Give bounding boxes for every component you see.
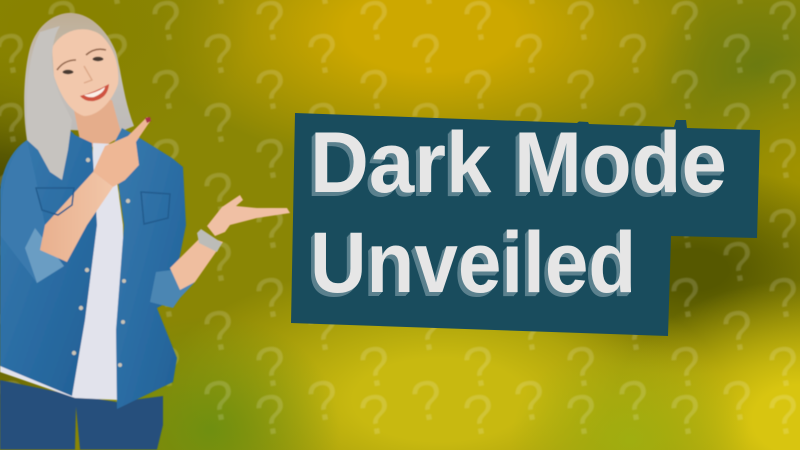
question mark pattern: ? <box>613 228 655 295</box>
question mark pattern: ? <box>94 89 136 156</box>
question mark pattern: ? <box>354 195 396 262</box>
question mark pattern: ? <box>458 381 500 448</box>
question mark pattern: ? <box>406 89 448 156</box>
question mark pattern: ? <box>302 159 344 226</box>
question mark pattern: ? <box>250 195 292 262</box>
question mark pattern: ? <box>406 297 448 364</box>
question mark pattern: ? <box>561 264 603 331</box>
question mark pattern: ? <box>94 297 136 364</box>
question mark pattern: ? <box>458 56 500 123</box>
question mark pattern: ? <box>42 125 84 192</box>
chest pocket left <box>36 188 74 215</box>
question mark pattern: ? <box>509 367 551 434</box>
question mark pattern: ? <box>94 20 136 87</box>
hair front lock <box>27 26 72 180</box>
open hand right <box>207 195 290 236</box>
question mark pattern: ? <box>354 381 396 448</box>
question mark pattern: ? <box>509 20 551 87</box>
eyes <box>62 57 104 74</box>
question mark pattern: ? <box>42 333 84 400</box>
question mark pattern: ? <box>717 297 759 364</box>
question mark pattern: ? <box>613 159 655 226</box>
question mark pattern: ? <box>613 20 655 87</box>
nose <box>84 66 92 83</box>
question mark pattern: ? <box>717 159 759 226</box>
question mark pattern: ? <box>665 333 707 400</box>
question mark pattern: ? <box>250 56 292 123</box>
question mark pattern: ? <box>354 333 396 400</box>
watch <box>197 229 222 252</box>
question mark pattern: ? <box>146 195 188 262</box>
question mark pattern: ? <box>406 159 448 226</box>
question mark pattern: ? <box>146 56 188 123</box>
question mark pattern: ? <box>406 20 448 87</box>
question mark pattern: ? <box>250 264 292 331</box>
chest pocket right <box>141 192 170 224</box>
question mark pattern: ? <box>509 89 551 156</box>
t-shirt <box>0 143 124 400</box>
question mark pattern: ? <box>613 89 655 156</box>
jeans <box>0 380 163 450</box>
question mark pattern: ? <box>302 297 344 364</box>
question mark pattern: ? <box>302 367 344 434</box>
question mark pattern: ? <box>665 381 707 448</box>
nail <box>145 117 151 123</box>
hand pointing <box>93 117 151 187</box>
question mark pattern: ? <box>613 367 655 434</box>
question mark pattern: ? <box>42 195 84 262</box>
question mark pattern: ? <box>302 89 344 156</box>
question mark pattern: ? <box>717 228 759 295</box>
smile <box>80 84 109 101</box>
question mark pattern: ? <box>198 159 240 226</box>
forearm pointing up <box>40 172 113 262</box>
question mark pattern: ? <box>146 333 188 400</box>
question mark pattern: ? <box>302 20 344 87</box>
question mark pattern: ? <box>458 195 500 262</box>
title line: Unveiled: Unveiled <box>310 215 636 311</box>
question mark pattern: ? <box>198 20 240 87</box>
denim jacket left <box>0 125 97 396</box>
denim jacket right <box>113 128 186 409</box>
question mark pattern: ? <box>458 125 500 192</box>
question mark pattern: ? <box>717 20 759 87</box>
question mark pattern: ? <box>458 333 500 400</box>
question mark pattern: ? <box>406 228 448 295</box>
question mark pattern: ? <box>94 367 136 434</box>
question mark pattern: ? <box>354 56 396 123</box>
question mark pattern: ? <box>509 159 551 226</box>
question mark pattern: ? <box>354 125 396 192</box>
question mark pattern: ? <box>42 56 84 123</box>
left sleeve <box>0 140 63 283</box>
question mark pattern: ? <box>509 228 551 295</box>
question mark pattern: ? <box>717 367 759 434</box>
hair back <box>24 13 134 180</box>
question mark pattern: ? <box>146 264 188 331</box>
question mark pattern: ? <box>561 56 603 123</box>
shirt buttons <box>72 158 130 367</box>
question mark pattern: ? <box>665 264 707 331</box>
question mark pattern: ? <box>458 264 500 331</box>
question mark pattern: ? <box>613 297 655 364</box>
question mark pattern: ? <box>198 89 240 156</box>
question mark pattern: ? <box>561 333 603 400</box>
question mark pattern: ? <box>42 264 84 331</box>
neck <box>72 100 122 150</box>
question mark pattern: ? <box>509 297 551 364</box>
question mark pattern: ? <box>561 195 603 262</box>
eyebrows <box>57 49 106 70</box>
question mark pattern: ? <box>665 56 707 123</box>
title line: Dark Mode: Dark Mode <box>310 115 727 211</box>
question mark pattern: ? <box>561 381 603 448</box>
question mark pattern: ? <box>198 297 240 364</box>
left sleeve cuff <box>25 228 64 283</box>
face <box>52 29 118 116</box>
question mark pattern: ? <box>250 381 292 448</box>
question mark pattern: ? <box>665 125 707 192</box>
question mark pattern: ? <box>198 228 240 295</box>
question mark pattern: ? <box>665 195 707 262</box>
question mark pattern: ? <box>94 159 136 226</box>
question mark pattern: ? <box>146 125 188 192</box>
right sleeve cuff <box>150 270 195 308</box>
question mark pattern: ? <box>250 333 292 400</box>
question mark pattern: ? <box>94 228 136 295</box>
question mark pattern: ? <box>250 125 292 192</box>
question mark pattern: ? <box>406 367 448 434</box>
question mark pattern: ? <box>717 89 759 156</box>
wrist arm right <box>170 235 223 290</box>
question mark pattern: ? <box>302 228 344 295</box>
question mark pattern: ? <box>354 264 396 331</box>
question mark pattern: ? <box>198 367 240 434</box>
question mark pattern: ? <box>561 125 603 192</box>
